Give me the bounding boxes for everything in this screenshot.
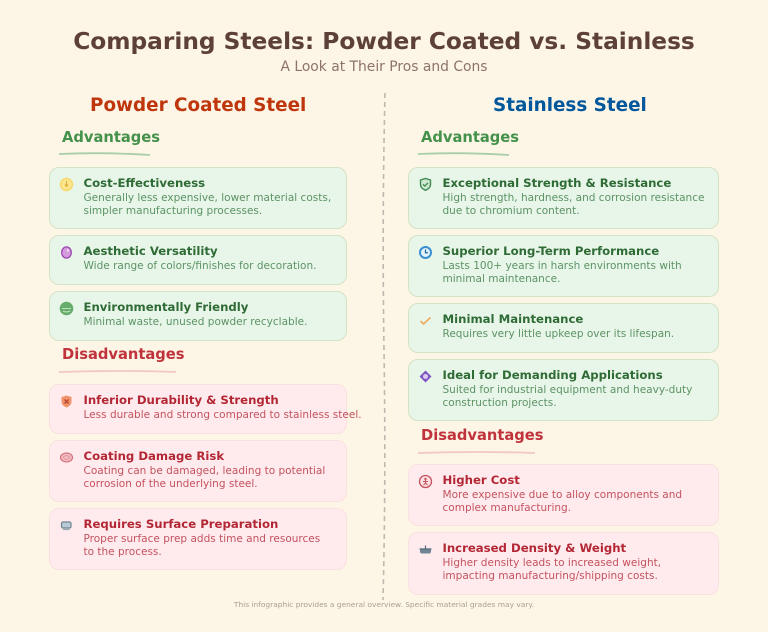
heading: powder coated advantages (59, 129, 160, 156)
panel: aesthetic versatility: Wide range of colors/finishes for decoration. (84, 260, 316, 272)
panel: exceptional strength and resistance (408, 167, 719, 229)
icon: person coin (418, 474, 432, 488)
icon: damaged coating (60, 452, 74, 463)
panel: higher cost: Higher Cost (442, 472, 520, 486)
panel: superior long-term performance: Lasts 100+ years in harsh environments with (442, 260, 682, 272)
footer note: This infographic provides a general overview. Specific material grades may vary. (234, 600, 534, 608)
panel: aesthetic versatility (49, 235, 347, 285)
heading: powder coated disadvantages (59, 346, 184, 373)
panel: ideal for demanding applications: construction projects. (442, 397, 557, 409)
panel: requires surface preparation (49, 508, 347, 570)
heading: stainless advantages (418, 129, 519, 156)
panel: minimal maintenance (408, 303, 719, 353)
column heading: powder coated steel: Powder Coated Steel (90, 94, 306, 116)
subtitle: A Look at Their Pros and Cons (280, 59, 488, 75)
panel: ideal for demanding applications: Suited for industrial equipment and heavy-duty (442, 384, 692, 396)
panel: cost-effectiveness: simpler manufacturing processes. (84, 205, 262, 217)
icon: shield check (420, 178, 432, 191)
heading: stainless advantages: Advantages (421, 129, 519, 146)
title: Comparing Steels: Powder Coated vs. Stainless (73, 28, 695, 55)
panel: coating damage risk (49, 440, 347, 502)
panel: higher cost: complex manufacturing. (442, 502, 571, 514)
panel: exceptional strength and resistance: Exceptional Strength & Resistance (442, 176, 671, 190)
panel: increased density and weight: Increased Density & Weight (442, 540, 626, 554)
panel: higher cost: More expensive due to alloy components and (442, 488, 682, 500)
panel: exceptional strength and resistance: High strength, hardness, and corrosion resistance (442, 192, 704, 204)
panel: environmentally friendly (49, 291, 347, 341)
heading: stainless disadvantages: Disadvantages (421, 426, 543, 444)
panel: inferior durability and strength: Less durable and strong compared to stainless steel. (84, 408, 362, 420)
panel: superior long-term performance: Superior Long-Term Performance (442, 244, 659, 258)
heading: powder coated disadvantages: Disadvantages (62, 346, 184, 363)
icon: globe (60, 302, 74, 316)
panel: environmentally friendly: Minimal waste, unused powder recyclable. (84, 316, 307, 328)
panel: exceptional strength and resistance: due to chromium content. (442, 205, 580, 217)
icon: check mark (420, 316, 431, 325)
panel: coating damage risk: Coating can be damaged, leading to potential (84, 464, 325, 476)
center dashed divider (382, 93, 386, 600)
panel: cost-effectiveness (49, 167, 347, 229)
panel: increased density and weight: Higher density leads to increased weight, (442, 556, 661, 568)
icon: target diamond (420, 370, 432, 382)
panel: superior long-term performance: minimal maintenance. (442, 273, 560, 285)
panel: coating damage risk: Coating Damage Risk (84, 448, 224, 462)
column heading: stainless steel: Stainless Steel (493, 94, 647, 116)
heading: powder coated advantages: Advantages (62, 129, 160, 146)
icon: surface tool (60, 521, 72, 530)
panel: requires surface preparation: to the process. (84, 546, 162, 558)
panel: higher cost (408, 464, 719, 526)
panel: ideal for demanding applications (408, 359, 719, 421)
panel: increased density and weight (408, 532, 719, 595)
icon: clock (419, 246, 432, 259)
icon: weight (420, 546, 432, 554)
panel: cost-effectiveness: Cost-Effectiveness (84, 176, 205, 190)
icon: x shield (62, 396, 72, 408)
heading: stainless disadvantages (418, 426, 543, 454)
panel: aesthetic versatility: Aesthetic Versatility (84, 244, 218, 258)
panel: environmentally friendly: Environmentally Friendly (84, 300, 248, 314)
icon: coin (60, 178, 74, 192)
panel: inferior durability and strength (49, 384, 347, 434)
panel: increased density and weight: impacting manufacturing/shipping costs. (442, 570, 658, 582)
panel: coating damage risk: corrosion of the underlying steel. (84, 478, 258, 490)
icon: palette (61, 246, 72, 259)
panel: ideal for demanding applications: Ideal for Demanding Applications (442, 368, 663, 382)
panel: cost-effectiveness: Generally less expensive, lower material costs, (84, 192, 331, 204)
panel: superior long-term performance (408, 235, 719, 297)
panel: requires surface preparation: Proper surface prep adds time and resources (84, 532, 320, 544)
panel: minimal maintenance: Minimal Maintenance (442, 312, 583, 326)
panel: inferior durability and strength: Inferior Durability & Strength (84, 392, 279, 406)
panel: requires surface preparation: Requires Surface Preparation (84, 516, 278, 530)
panel: minimal maintenance: Requires very little upkeep over its lifespan. (442, 328, 674, 340)
